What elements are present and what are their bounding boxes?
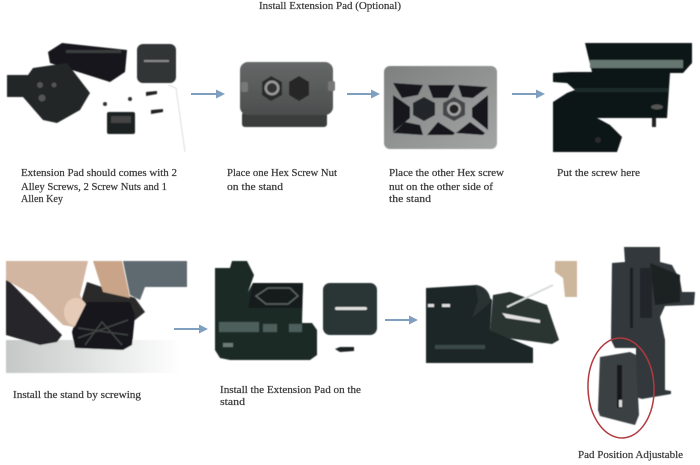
title: Install Extension Pad (Optional) bbox=[259, 0, 401, 12]
red highlight ellipse bbox=[586, 337, 656, 439]
caption: other hex nut bbox=[389, 167, 504, 205]
photo: pad underside with hex nut bbox=[384, 66, 497, 149]
caption: install pad: stand bbox=[220, 396, 246, 408]
caption: other hex nut: nut on the other side of bbox=[389, 181, 493, 193]
photo: extension pad on stand with pad and screw bbox=[215, 261, 377, 360]
arrow 2 bbox=[347, 90, 380, 98]
caption: kit contents: Alley Screws, 2 Screw Nuts and 1 bbox=[21, 181, 167, 193]
caption: other hex nut: Place the other Hex screw bbox=[389, 167, 504, 179]
arrow 3 bbox=[512, 90, 545, 98]
caption: kit contents: Allen Key bbox=[21, 193, 63, 205]
photo: assembled stand with red circle bbox=[586, 247, 695, 439]
caption: kit contents: Extension Pad should comes with 2 bbox=[21, 167, 177, 179]
arrow 4 bbox=[174, 324, 208, 334]
photo: screw position bbox=[553, 43, 692, 152]
caption: hex nut bbox=[227, 167, 337, 193]
photo: hand installing stand bbox=[6, 261, 187, 373]
photo: fastening pad with Allen key bbox=[426, 261, 577, 363]
photo: hex nut on stand bbox=[240, 62, 335, 127]
photo: kit contents bbox=[7, 43, 185, 152]
caption: install pad: Install the Extension Pad on the bbox=[220, 384, 361, 396]
caption: hex nut: Place one Hex Screw Nut bbox=[227, 167, 337, 179]
caption: install pad bbox=[220, 384, 361, 408]
caption: install stand: Install the stand by screwing bbox=[13, 389, 141, 401]
caption: hex nut: on the stand bbox=[227, 181, 284, 193]
caption: kit contents bbox=[21, 167, 177, 205]
caption: screw: Put the screw here bbox=[557, 167, 640, 179]
arrow 5 bbox=[385, 316, 418, 324]
arrow 1 bbox=[191, 90, 225, 98]
caption: other hex nut: the stand bbox=[389, 193, 432, 205]
caption: pad position: Pad Position Adjustable bbox=[578, 449, 683, 461]
